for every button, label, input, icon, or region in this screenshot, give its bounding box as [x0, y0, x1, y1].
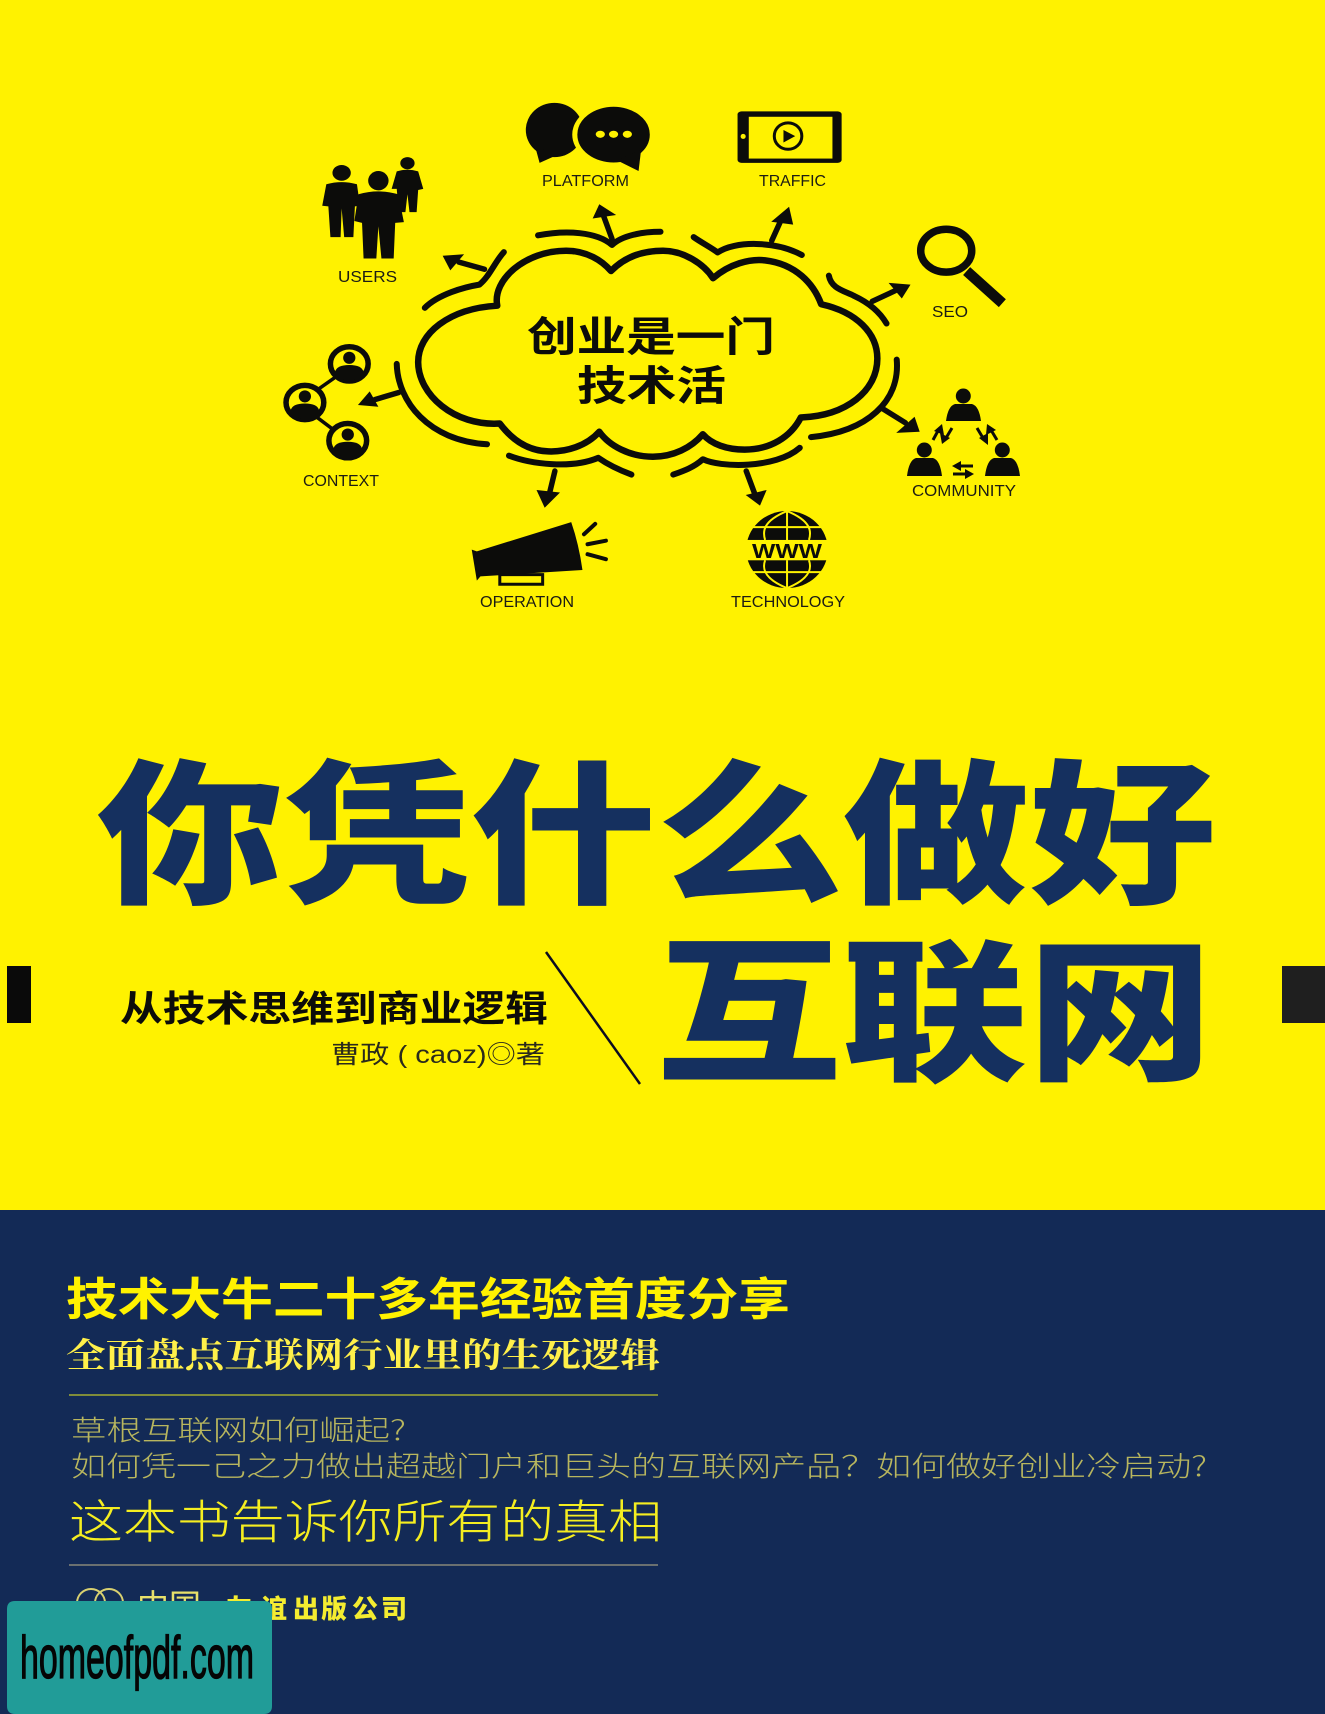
question line 2: 如何凭一己之力做出超越门户和巨头的互联网产品？如何做好创业冷启动?	[71, 1445, 1207, 1485]
diagonal divider slash	[546, 952, 640, 1084]
rule 2	[69, 1564, 658, 1566]
publisher	[77, 1581, 407, 1627]
label: users: USERS	[338, 269, 397, 286]
publisher logo	[77, 1589, 123, 1617]
navy headline 1: 技术大牛二十多年经验首度分享	[66, 1263, 790, 1328]
label: operation: OPERATION	[480, 594, 574, 611]
icon: platform speech bubbles	[526, 103, 652, 171]
cloud outline	[418, 251, 877, 457]
cloud text line 2: 技术活	[577, 352, 726, 412]
icon: technology globe	[742, 511, 832, 588]
publisher name: 友谊出版公司	[226, 1589, 407, 1626]
right black tab	[1282, 966, 1325, 1023]
globe www text: WWW	[752, 541, 822, 563]
diagram: cloud with icons	[286, 103, 1020, 611]
icon: seo magnifier	[921, 229, 1002, 303]
author: 曹政 ( caoz)◎著	[331, 1041, 545, 1069]
tagline: 这本书告诉你所有的真相	[69, 1486, 662, 1552]
label: technology: TECHNOLOGY	[731, 594, 845, 611]
publisher name china: 中国	[137, 1581, 201, 1627]
icon: users	[322, 157, 423, 259]
title line 1: 你凭什么做好	[97, 710, 1216, 936]
outer arcs	[397, 232, 897, 475]
question line 1: 草根互联网如何崛起?	[71, 1409, 406, 1449]
label: context: CONTEXT	[303, 473, 380, 490]
icon: context network	[286, 347, 368, 458]
label: community: COMMUNITY	[912, 483, 1016, 500]
label: platform: PLATFORM	[542, 173, 629, 190]
watermark text: homeofpdf.com	[20, 1624, 254, 1691]
arrows	[358, 204, 920, 508]
panel: navy lower band	[0, 1210, 1325, 1714]
rule 1	[69, 1394, 658, 1396]
navy headline 2: 全面盘点互联网行业里的生死逻辑	[66, 1337, 660, 1375]
cloud and arcs drawing	[286, 103, 1002, 588]
teal box	[7, 1601, 272, 1714]
cloud text line 1: 创业是一门	[527, 303, 775, 363]
watermark badge	[7, 1601, 272, 1714]
icon: community triangle	[907, 388, 1020, 479]
icon: operation megaphone	[472, 522, 606, 584]
label: seo: SEO	[932, 304, 968, 321]
icon: traffic tablet	[738, 111, 842, 163]
panel: yellow upper cover	[0, 0, 1325, 1210]
title line 2: 互联网	[656, 890, 1213, 1113]
left black tab	[7, 966, 31, 1023]
label: traffic: TRAFFIC	[759, 173, 826, 190]
subtitle: 从技术思维到商业逻辑	[120, 988, 548, 1029]
